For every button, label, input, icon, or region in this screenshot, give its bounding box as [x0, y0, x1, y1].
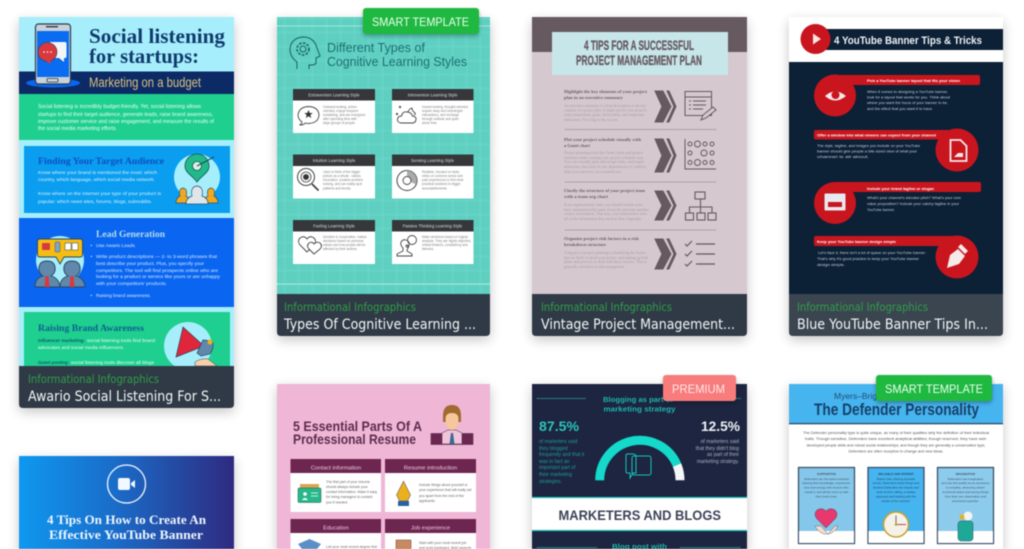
panel: reliable and patient: finished Defenders are steady and	[873, 486, 919, 490]
icon: chevrons	[655, 139, 676, 172]
stat: 87.5%: strategies.	[539, 479, 562, 485]
tip 3: What's your channel's elevator pitch? What's your core	[867, 195, 962, 200]
tip 4: that are likely to derail your project, and making up both	[564, 256, 648, 261]
tip 3: basic information like name, hierarchy and team member	[564, 208, 650, 213]
panel: extraversion: Outward-looking, action-	[323, 105, 358, 109]
panel: supportive: needs it, and all the more so with	[805, 490, 849, 494]
tip 3: Include your brand tagline or slogan	[867, 186, 935, 191]
panel: sensing: Sensing Learning Style	[411, 158, 455, 163]
panel: reliable and patient: needs of the moment.	[881, 499, 911, 503]
infographic background	[789, 384, 1003, 549]
icon: person thinking	[397, 236, 416, 256]
panel: job experience	[385, 519, 476, 549]
tip 3: with a team org chart	[564, 194, 609, 199]
description	[803, 430, 989, 454]
header: Myers–Briggs	[834, 391, 886, 401]
infographic background	[532, 17, 747, 294]
panel: lead generation: looking for a product or service like yours or are unhappy	[96, 274, 221, 280]
panel: imaginative: IMAGINATIVE	[956, 472, 975, 476]
panel: extraversion	[293, 89, 375, 133]
panel: lead generation: Lead Generation	[96, 229, 165, 239]
panel: lead generation: with your competitors' products.	[96, 281, 167, 287]
panel: feeling: decisions based on personal	[323, 239, 364, 243]
card: Awario social listening	[19, 17, 234, 408]
divider	[565, 130, 716, 230]
tip 4: Organize project risk factors in a risk	[564, 236, 640, 241]
panel: extraversion: large groups of people.	[323, 121, 356, 125]
panel: feeling	[293, 220, 375, 264]
panel: introduction: Social listening is incredibly budget-friendly. Yet, social listening allows	[38, 104, 202, 110]
panel: lead generation: •	[90, 244, 92, 249]
icon: head with gear	[290, 37, 320, 69]
tip 2	[814, 128, 978, 172]
icon: heart in hands	[815, 509, 838, 534]
panel: raising brand awareness: Raising Brand Awareness	[38, 323, 145, 333]
panel: education: Education	[323, 526, 349, 532]
panel: raising brand awareness: Influencer marketing:	[38, 338, 85, 344]
panel: lead generation: Write product descriptions — 2- to 3-word phrases that	[96, 254, 218, 260]
tip 1	[814, 74, 980, 116]
stat: 87.5%: they blogged	[539, 446, 568, 452]
panel: resume introduction: your experience that will really set	[419, 488, 472, 492]
heading: Professional Resume	[293, 431, 416, 447]
panel: raising brand awareness: social listening tools find brand	[87, 338, 155, 344]
header	[789, 384, 1003, 424]
tip 4: Keep your YouTube banner design simple	[817, 239, 897, 244]
heading: Blogging as part of	[603, 395, 674, 404]
icon: banner card	[824, 194, 846, 210]
stat: 87.5%: 87.5%	[539, 418, 580, 434]
card: marketers and blogs	[532, 375, 747, 549]
tip 4: Let's face it, there isn't a lot of space on your YouTube banner.	[818, 250, 926, 255]
footer: cognitive card	[277, 294, 490, 336]
tip 4: That's why it's good practice to keep your YouTube banner	[817, 256, 920, 261]
panel: intuition: Likes to think of the bigger	[323, 170, 361, 174]
stat: 87.5%: important part of	[539, 465, 576, 471]
icon: two people with speech bubble	[35, 236, 85, 287]
description: developed people skills and robust social relationships; and though they are generally a conservative type,	[806, 442, 986, 448]
icon: org chart	[686, 192, 716, 220]
stat: 12.5%: of marketers said	[701, 439, 739, 445]
heading	[552, 32, 728, 75]
stat: 87.5%: frequently and that it	[539, 452, 585, 458]
footer: YouTube card: Informational Infographics	[797, 300, 928, 314]
panel: finding your target audience: popular: which news sites, forums, blogs, subreddits.	[38, 199, 152, 205]
tip 1: look for a layout that works for you. Think about	[867, 95, 951, 100]
icon: chevrons	[655, 191, 676, 220]
panel: extraversion: after spending time with	[323, 117, 357, 121]
stat: 12.5%	[696, 418, 741, 465]
tip 1: where you want the focus of your banner to be,	[867, 100, 948, 105]
panel: introversion: require deep and meaningful	[422, 109, 463, 113]
tip 1: plan in an executive summary	[564, 95, 624, 100]
panel: introduction: the social media marketing efforts.	[38, 126, 117, 132]
card: defender personality	[789, 375, 1003, 549]
tip 3: all of the information they need at their fingertips.	[564, 217, 642, 221]
stat: 87.5%	[539, 418, 585, 485]
heading	[47, 512, 207, 542]
tip 3: Clarify the structure of your project team	[564, 188, 645, 193]
icon: play button	[800, 24, 830, 54]
icon: pen nib	[396, 481, 410, 506]
stat: 12.5%: that they didn't blog	[696, 446, 739, 452]
tip 4	[564, 236, 715, 269]
heading	[89, 24, 225, 68]
footer: YouTube card: Blue YouTube Banner Tips In...	[797, 317, 988, 333]
panel: feeling: affected by their actions.	[323, 247, 358, 251]
tip 2: banner should give people a bite-sized view of what your	[817, 148, 918, 154]
stat: 12.5%: as part of their	[707, 452, 739, 458]
description: traits. Though sensitive, Defenders have excellent analytical abilities; though reserved, they have well-	[805, 436, 988, 441]
heading: Effective YouTube Banner	[49, 527, 203, 542]
panel: resume introduction: you apart from the rest of the	[419, 494, 464, 498]
panel: lead generation: Raising brand awareness.	[96, 293, 151, 299]
panel: lead generation: best describe your product. Plus, you specify your	[96, 261, 204, 267]
panel: introversion: interactions, and recharge	[422, 113, 459, 117]
tip 2: Offer a window into what viewers can expect from your channel	[817, 132, 936, 138]
icon: donut chart	[397, 170, 417, 190]
panel: imaginative: from their own observation and	[945, 494, 986, 498]
tip 4: A big part of project planning is identifying the factors	[564, 251, 647, 255]
panel: lead generation	[19, 218, 234, 307]
panel: intuition	[293, 154, 375, 198]
stat: 12.5%: 12.5%	[701, 418, 741, 434]
panel: reliable and patient: Rather than offering sporadic	[877, 477, 916, 481]
tip 3: contact information. That way, your stakeholders have	[564, 212, 647, 217]
panel: reliable and patient	[868, 468, 924, 544]
badge: premium: PREMIUM	[672, 384, 725, 396]
footer: vintage card	[532, 294, 747, 336]
panel: finding your target audience: country, which language, which social media network.	[38, 177, 155, 183]
tip 1: contents of a project plan. It might specify your project's	[564, 108, 648, 112]
panel: passive thinking: analysis. They are highly objective,	[422, 239, 471, 243]
tip 3	[564, 188, 716, 221]
icon: two hearts	[298, 237, 322, 254]
panel: introversion: through solitude and quiet	[422, 117, 459, 121]
card: professional resume	[277, 384, 490, 549]
tip 1: and the effect that you want it to have.	[867, 106, 933, 111]
tip 4	[814, 236, 978, 278]
panel: contact information: The first part of your resume	[326, 480, 370, 484]
heading bar	[825, 29, 1003, 50]
panel: contact information: contact information. Make it easy	[326, 490, 377, 494]
panel: reliable and patient: bursts, Defenders finish things and	[873, 481, 919, 485]
panel: lead generation: •	[90, 255, 92, 260]
panel: passive thinking: critical thinkers, consistency and	[422, 243, 468, 247]
stat: 87.5%: of marketers said	[539, 439, 578, 445]
panel: sensing: relies on common sense and	[422, 174, 463, 178]
header: The Defender Personality	[814, 401, 980, 419]
icon: chevrons	[655, 239, 676, 269]
panel: intuition: patterns and trends.	[323, 186, 351, 190]
panel: lead generation: competitors. The tool will find prospects online who are	[96, 268, 218, 274]
badge: smart template	[876, 375, 992, 403]
panel: extraversion: Extraversion Learning Style	[308, 92, 360, 98]
card: YouTube banner gradient	[19, 456, 234, 549]
panel: contact information: you if needed.	[326, 500, 348, 504]
panel: raising brand awareness	[24, 312, 230, 370]
infographic background	[277, 17, 490, 294]
icon: graduation cap	[298, 539, 321, 549]
infographic background	[532, 384, 747, 549]
stat: 87.5%: their marketing	[539, 472, 572, 478]
panel: feeling: Decisive & cooperative, makes	[323, 235, 367, 239]
panel: passive thinking: Passive Thinking Learning Style	[403, 224, 463, 228]
icon: jar with flowers	[958, 512, 973, 541]
tip 1	[564, 89, 716, 122]
footer: YouTube card	[789, 294, 1003, 336]
panel: supportive: SUPPORTIVE	[817, 472, 836, 476]
heading: marketing strategy	[604, 404, 676, 414]
icon: professional woman	[431, 405, 473, 444]
panel: introversion: Inward-looking, thought-oriented,	[422, 105, 469, 109]
panel: raising brand awareness: advocates and social media influencers.	[38, 345, 124, 351]
tip 2: timelines make creating your project schedule easy.	[564, 156, 644, 160]
panel: introversion	[392, 89, 474, 133]
tip 2: The style, tagline, and images you include on your YouTube	[817, 143, 921, 148]
panel: contact information: should always include your	[326, 485, 369, 489]
tip 1: An executive summary is a brief description of the key	[564, 104, 646, 108]
tip 2: milestones, then look for any dependencies or conflicts	[564, 165, 647, 170]
panel: feeling: Feeling Learning Style	[313, 224, 356, 228]
icon: megaphone	[164, 322, 217, 370]
tip 2: Project planning tools like Gantt charts and project	[564, 151, 643, 155]
panel: resume introduction: Resume introduction	[404, 466, 457, 472]
panel: introduction	[19, 94, 234, 140]
icon: checklist	[685, 241, 715, 266]
icon: eye	[825, 91, 846, 100]
panel: sensing: practical solutions to bigger	[422, 182, 462, 186]
panel: introduction: improve customer service and raise engagement, and measure the results of	[38, 119, 215, 125]
panel: sensing: Realistic, focused on facts,	[422, 170, 460, 174]
infographic background	[19, 17, 234, 366]
icon: chevrons	[655, 91, 676, 122]
panel: introduction: startups to find their target audience, generate leads, raise brand awareness,	[38, 112, 213, 118]
stat: 87.5%: was in fact an	[539, 459, 570, 465]
heading: for startups:	[89, 44, 199, 68]
icon: cloud and moon	[396, 106, 416, 123]
badge: premium	[663, 375, 736, 403]
icon: video camera	[108, 465, 146, 503]
panel: intuition: innovation, creative problem	[323, 178, 363, 182]
panel: contact information: Contact information	[311, 466, 361, 472]
footer: Awario card	[19, 366, 234, 408]
icon: eye under magnifier	[298, 168, 318, 190]
icon: speech bubble with star	[298, 106, 319, 125]
tip 3: value proposition? Include your catchy tagline in your	[867, 201, 960, 206]
panel: finding your target audience: Finding Your Target Audience	[38, 156, 164, 166]
panel: sensing: accomplishments.	[422, 186, 448, 190]
panel: supportive: sharing their knowledge, experience,	[802, 481, 851, 485]
tip 4: plans and process to deal with these factors. This is	[564, 260, 648, 264]
panel: passive thinking: fairness.	[422, 247, 434, 251]
footer: Awario card: Informational Infographics	[28, 372, 159, 386]
panel: introversion: alone time.	[422, 121, 438, 125]
panel: job experience: Start with your most recent job	[419, 541, 466, 545]
heading: PROJECT MANAGEMENT PLAN	[576, 52, 702, 68]
panel: imaginative: Defenders use imagination	[948, 477, 984, 481]
panel: imaginative: perceived expertise.	[952, 499, 979, 503]
card: YouTube banner tips	[789, 17, 1003, 336]
subheading: Marketing on a budget	[89, 75, 201, 90]
panel: job experience: Job experience	[411, 526, 450, 532]
panel: extraversion: oriented, enjoys frequent	[323, 109, 358, 113]
stat: 12.5%: marketing strategy.	[697, 459, 739, 465]
panel: intuition: solving, and can easily spot	[323, 182, 362, 186]
heading: 5 Essential Parts Of A	[293, 418, 422, 434]
panel: introversion: Introversion Learning Style	[408, 92, 458, 98]
icon: briefcase tools	[396, 540, 411, 549]
panel: supportive: Defenders are the action-oriented	[804, 477, 849, 481]
icon: target audience	[174, 154, 220, 204]
footer: cognitive card: Informational Infographics	[284, 300, 416, 314]
tip 4: design simple.	[817, 262, 845, 267]
tip 3	[814, 182, 981, 224]
tip 1: value proposition, goals, deliverables, and important	[564, 113, 644, 118]
section banner	[532, 497, 747, 531]
card: vintage project management	[532, 17, 747, 336]
title band	[19, 72, 234, 94]
icon: document	[950, 140, 966, 161]
tip 2: a Gantt chart	[564, 143, 591, 148]
panel: reliable and patient: RELIABLE AND PATIENT	[878, 472, 914, 476]
tip 4: breakdown structure	[564, 242, 606, 247]
panel: resume introduction	[385, 459, 476, 512]
section banner: MARKETERS AND BLOGS	[558, 507, 721, 523]
badge: smart template: SMART TEMPLATE	[372, 15, 469, 29]
panel: imaginative: to empathy, observing others'	[946, 486, 985, 490]
panel: supportive: their loved ones.	[815, 494, 838, 498]
footer: vintage card: Vintage Project Management...	[541, 317, 735, 333]
icon: book with chat	[626, 454, 651, 478]
panel: feeling: values and how people will be	[323, 243, 366, 247]
panel: supportive: time and energy with anyone who	[804, 486, 849, 490]
tip 2: Plot your project schedule visually with	[564, 137, 642, 142]
icon: smartphone with chat bubbles	[26, 24, 80, 88]
panel: lead generation: Use Awario Leads.	[96, 243, 136, 249]
tip 1: milestones. Not a big to the success	[564, 118, 619, 122]
panel: education	[290, 519, 381, 549]
tip 2	[564, 137, 716, 174]
panel: imaginative	[938, 468, 994, 544]
tip 1: Pick a YouTube banner layout that fits your vision	[867, 78, 961, 83]
infographic background	[789, 17, 1003, 294]
panel: resume introduction: applicants.	[419, 499, 436, 503]
icon: clock	[884, 512, 908, 537]
description: The Defender personality type is quite unique, as many of their qualities defy the definition of their individual	[803, 430, 989, 435]
panel: lead generation: •	[90, 294, 92, 299]
heading: Social listening	[89, 24, 225, 48]
badge: smart template	[363, 8, 479, 36]
icon: dot chart	[685, 139, 716, 169]
tip 2: that you haven't accounted for.	[564, 170, 622, 174]
panel: reliable and patient: approach and leading with the	[876, 494, 916, 498]
gauge chart	[600, 440, 680, 480]
tip 3: In an organizational chart, you should include some	[564, 203, 643, 208]
panel: passive thinking	[392, 220, 474, 264]
icon: fountain pen	[947, 244, 968, 268]
heading	[293, 420, 422, 445]
heading: 4 TIPS FOR A SUCCESSFUL	[584, 37, 694, 53]
panel: sensing: past experiences to find what	[422, 178, 463, 182]
panel: finding your target audience: Know where your brand is mentioned the most: which	[38, 170, 157, 176]
panel: contact information: for hiring managers to contact	[326, 495, 372, 499]
tip 2: channel is all about.	[817, 154, 869, 159]
icon: document with pencil	[685, 92, 716, 120]
panel: raising brand awareness: Guest posting:	[38, 360, 69, 366]
panel: intuition: picture as a whole - values	[323, 174, 361, 178]
panel: reliable and patient: work at their calling, a steady	[877, 490, 916, 494]
panel: passive thinking: Make decisions based on logical	[422, 235, 468, 239]
panel: finding your target audience: Know where on the Internet your type of your product is	[38, 191, 162, 197]
description: Defenders are often receptive to change and new ideas.	[848, 448, 944, 454]
footer: cognitive card: Types Of Cognitive Learning ...	[283, 317, 476, 333]
tip 2: You can visually plan and assign tasks, and major	[564, 160, 645, 165]
footer: vintage card: Informational Infographics	[541, 300, 672, 314]
panel: contact information	[290, 459, 381, 512]
heading bar: 4 YouTube Banner Tips & Tricks	[834, 35, 982, 47]
infographic background	[277, 384, 490, 549]
panel: resume introduction: Include things about yourself or	[419, 483, 468, 487]
heading: 4 Tips On How to Create An	[47, 512, 207, 527]
panel: finding your target audience	[24, 146, 230, 213]
heading: Cognitive Learning Styles	[327, 54, 467, 69]
panel: imaginative: emotional states and seeing things	[942, 490, 989, 494]
card: cognitive learning styles	[277, 8, 490, 336]
heading	[327, 40, 467, 69]
tip 1: Highlight the key elements of your project	[564, 89, 648, 94]
heading: Different Types of	[327, 40, 425, 55]
tip 1: When it comes to designing a YouTube banner,	[867, 89, 948, 94]
tip 4: generally referred to as risk management.	[564, 265, 625, 269]
panel: supportive	[798, 468, 854, 544]
panel: extraversion: socializing, and are energized	[323, 113, 365, 117]
icon: contact card	[298, 484, 321, 502]
tip 3: YouTube banner.	[867, 207, 895, 212]
panel: education: List your most recent degree first	[326, 545, 377, 549]
footer: Awario card: Awario Social Listening For S...	[28, 389, 221, 405]
panel: raising brand awareness: social listening tools discover all blogs	[71, 360, 155, 366]
panel: sensing	[392, 154, 474, 198]
badge: smart template: SMART TEMPLATE	[885, 382, 983, 396]
heading	[603, 395, 676, 414]
panel: imaginative: and use this quality as an accessory	[941, 481, 990, 485]
panel: intuition: Intuition Learning Style	[313, 158, 356, 163]
